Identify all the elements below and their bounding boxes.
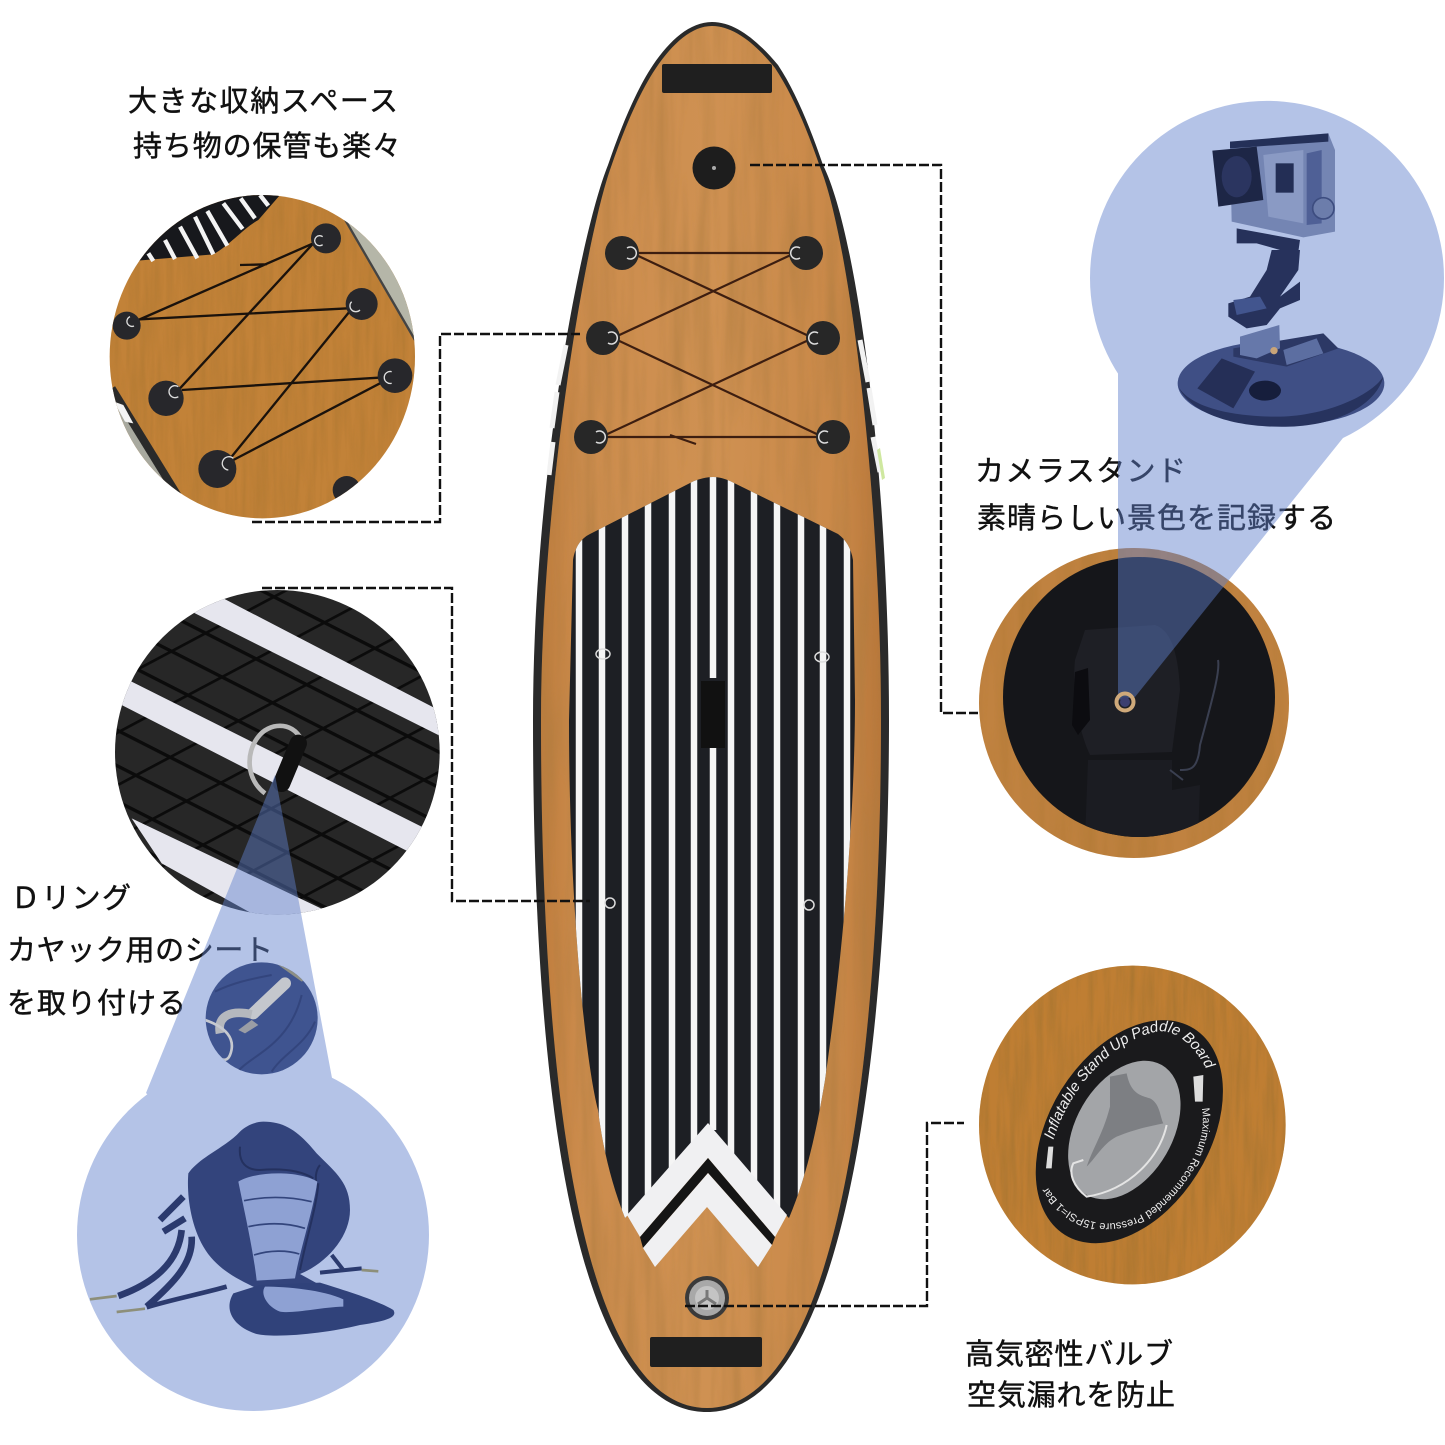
rail green accent	[877, 448, 885, 480]
chevron lower	[643, 1173, 772, 1267]
white stripes	[118, 597, 442, 927]
black valve label	[997, 986, 1262, 1277]
carabiner shaft	[253, 983, 285, 1013]
pads	[113, 223, 412, 504]
valve cap	[1087, 1073, 1163, 1167]
inner camera	[1263, 150, 1303, 223]
mount block	[1233, 333, 1338, 367]
rail white patch	[114, 402, 133, 423]
valve close-up circle	[979, 966, 1286, 1284]
rail edge right	[343, 217, 415, 340]
fabric	[206, 962, 318, 1074]
heading: camera stand	[975, 456, 1336, 535]
clip	[1072, 668, 1090, 735]
heading: valve: 空気漏れを防止	[967, 1379, 1175, 1412]
label side marks	[1046, 1075, 1203, 1168]
action camera on mount	[1178, 133, 1384, 427]
valve wire	[1071, 1125, 1167, 1197]
deck pad	[569, 477, 855, 1218]
deck pad corner	[140, 195, 279, 260]
seat back	[188, 1122, 350, 1288]
pad corner stripes	[148, 195, 268, 261]
top handle	[662, 64, 772, 93]
rail edge left	[112, 388, 178, 497]
leader storage	[252, 334, 580, 522]
housing top	[1230, 133, 1328, 148]
heading: storage: 持ち物の保管も楽々	[133, 130, 401, 163]
d-rings	[596, 247, 828, 443]
bungee	[138, 243, 380, 460]
heading: camera stand: カメラスタンド	[975, 456, 1186, 488]
strap to seat	[147, 1287, 227, 1307]
leader camera	[750, 165, 978, 713]
leader lines	[252, 165, 978, 1306]
heading: storage	[128, 85, 401, 163]
mount base	[1178, 341, 1384, 426]
base slope	[1197, 358, 1255, 408]
wood deck	[541, 26, 881, 1408]
kayak seat	[90, 1122, 394, 1336]
thumb screw	[1313, 198, 1334, 219]
deck pad close-up circle	[115, 590, 440, 915]
carabiner hook	[220, 1013, 252, 1033]
chevron gap	[640, 1158, 775, 1248]
left straps	[118, 1197, 192, 1307]
wood grain	[541, 26, 881, 1408]
heading: valve: 高気密性バルブ	[965, 1338, 1173, 1371]
wood surround	[979, 548, 1289, 858]
valve body	[1045, 1041, 1204, 1219]
camera mount pad	[692, 146, 736, 190]
blue callout bubble: camera	[1090, 101, 1444, 700]
deck pad stripes	[579, 470, 847, 1300]
lens block	[1212, 147, 1263, 207]
hinge	[1237, 228, 1300, 252]
bungee cords	[601, 253, 823, 444]
strap end	[278, 965, 304, 982]
housing	[1230, 133, 1335, 237]
d-ring pads	[574, 236, 850, 454]
wood background	[979, 966, 1286, 1284]
wood grain texture	[110, 196, 415, 518]
headrest seam	[240, 1147, 320, 1270]
heading: d-ring	[7, 882, 273, 1020]
storage detail circle	[110, 195, 415, 518]
air valve	[685, 1276, 729, 1320]
lens	[1222, 156, 1252, 197]
fabric folds	[215, 975, 315, 1075]
leader d-ring	[262, 588, 590, 901]
bottom handle	[650, 1337, 762, 1367]
mount relief	[1074, 625, 1180, 755]
seat bottom	[229, 1283, 394, 1336]
ring	[250, 726, 302, 793]
camera mount close-up circle	[979, 548, 1289, 858]
small carabiner circle	[205, 962, 318, 1075]
highlight lines	[1170, 660, 1218, 780]
base shadow	[1178, 377, 1383, 427]
buckles	[90, 1270, 378, 1312]
side panel	[1307, 150, 1322, 225]
right strap	[320, 1255, 362, 1273]
arm	[1228, 250, 1300, 328]
blue callout bubble: kayak seat	[77, 775, 429, 1411]
rail stripes left	[549, 345, 566, 475]
gate	[238, 1020, 258, 1033]
paddle board	[533, 22, 889, 1412]
arm highlight	[1233, 297, 1267, 315]
heading: valve	[965, 1338, 1175, 1412]
heading: camera stand: 素晴らしい景色を記録する	[977, 502, 1336, 535]
heading: d-ring: を取り付ける	[7, 987, 186, 1020]
black mount plate	[1003, 557, 1275, 837]
screen	[1276, 163, 1294, 193]
centre black patch	[701, 681, 725, 748]
insert seams	[244, 1198, 312, 1255]
back insert	[238, 1173, 317, 1281]
chevron upper	[627, 1123, 787, 1237]
leader valve	[685, 1123, 964, 1306]
background edge left	[112, 388, 172, 488]
lower bracket	[1086, 822, 1199, 837]
rings	[127, 236, 392, 470]
seat cushion	[263, 1287, 343, 1312]
ring	[205, 1020, 232, 1060]
rail stripes right	[860, 340, 880, 472]
strap	[282, 743, 298, 783]
label text lower: Maximum Recommended Pressure 15PSI=1 Bar	[1042, 1108, 1210, 1230]
mount plate	[1283, 338, 1323, 365]
heading: d-ring: Ｄリング	[11, 882, 131, 915]
deck d-rings	[596, 649, 829, 910]
heading: storage: 大きな収納スペース	[128, 85, 398, 118]
brass screw insert	[1116, 694, 1134, 710]
label text upper: Inflatable Stand Up Paddle Board	[1044, 1020, 1216, 1140]
mount upright	[1240, 325, 1280, 358]
heading: d-ring: カヤック用のシート	[7, 935, 273, 967]
screw	[1270, 347, 1278, 354]
base hole	[1249, 381, 1281, 401]
background edge right	[347, 222, 414, 338]
board rail outline	[533, 22, 889, 1412]
